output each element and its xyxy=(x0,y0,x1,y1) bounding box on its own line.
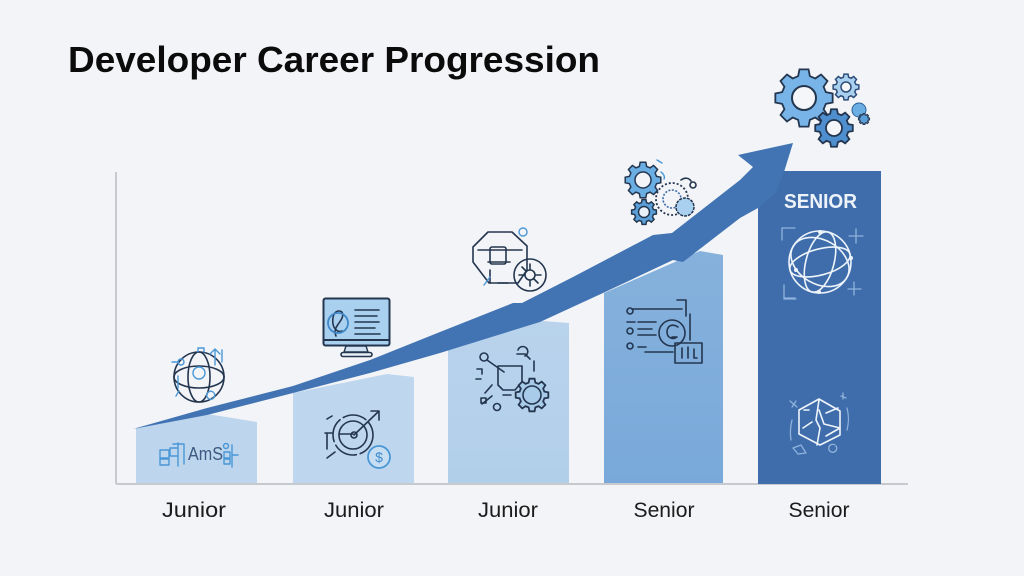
icon: shield with atom above bar 3 xyxy=(473,228,546,291)
heading: senior: SENIOR xyxy=(784,191,858,213)
label: senior 4: Senior xyxy=(634,499,695,522)
label: junior 1: Junior xyxy=(162,499,226,522)
growth arrow xyxy=(133,143,793,429)
label: junior 2: Junior xyxy=(324,499,384,522)
icon: bar 1 blocks and AmS text: AmS xyxy=(188,444,223,464)
icon: gauge with dollar coin xyxy=(325,411,390,468)
bar 3: junior xyxy=(448,321,569,483)
icon: dashboard panel xyxy=(627,300,702,363)
title: Developer Career Progression xyxy=(68,39,600,80)
label: senior 5: Senior xyxy=(788,499,850,522)
bar 5: senior xyxy=(758,171,881,484)
bar 2: junior xyxy=(293,374,414,483)
bar 4: senior xyxy=(604,251,723,483)
icon: globe above bar 1 xyxy=(172,348,224,402)
icon: senior wire globe xyxy=(782,227,863,299)
icon: monitor above bar 2 xyxy=(324,298,390,356)
icon: gears above bar 4 xyxy=(625,160,696,224)
icon: large gears above bar 5 xyxy=(775,69,869,147)
chart axes xyxy=(116,172,908,484)
icon: senior hexagon xyxy=(790,393,848,454)
icon: gauge with dollar coin: $ xyxy=(375,449,383,465)
icon: bar 1 blocks and AmS text xyxy=(160,443,238,467)
icon: circuit box and gear xyxy=(476,347,548,411)
bar 1: junior xyxy=(136,414,257,483)
label: junior 3: Junior xyxy=(478,499,538,522)
